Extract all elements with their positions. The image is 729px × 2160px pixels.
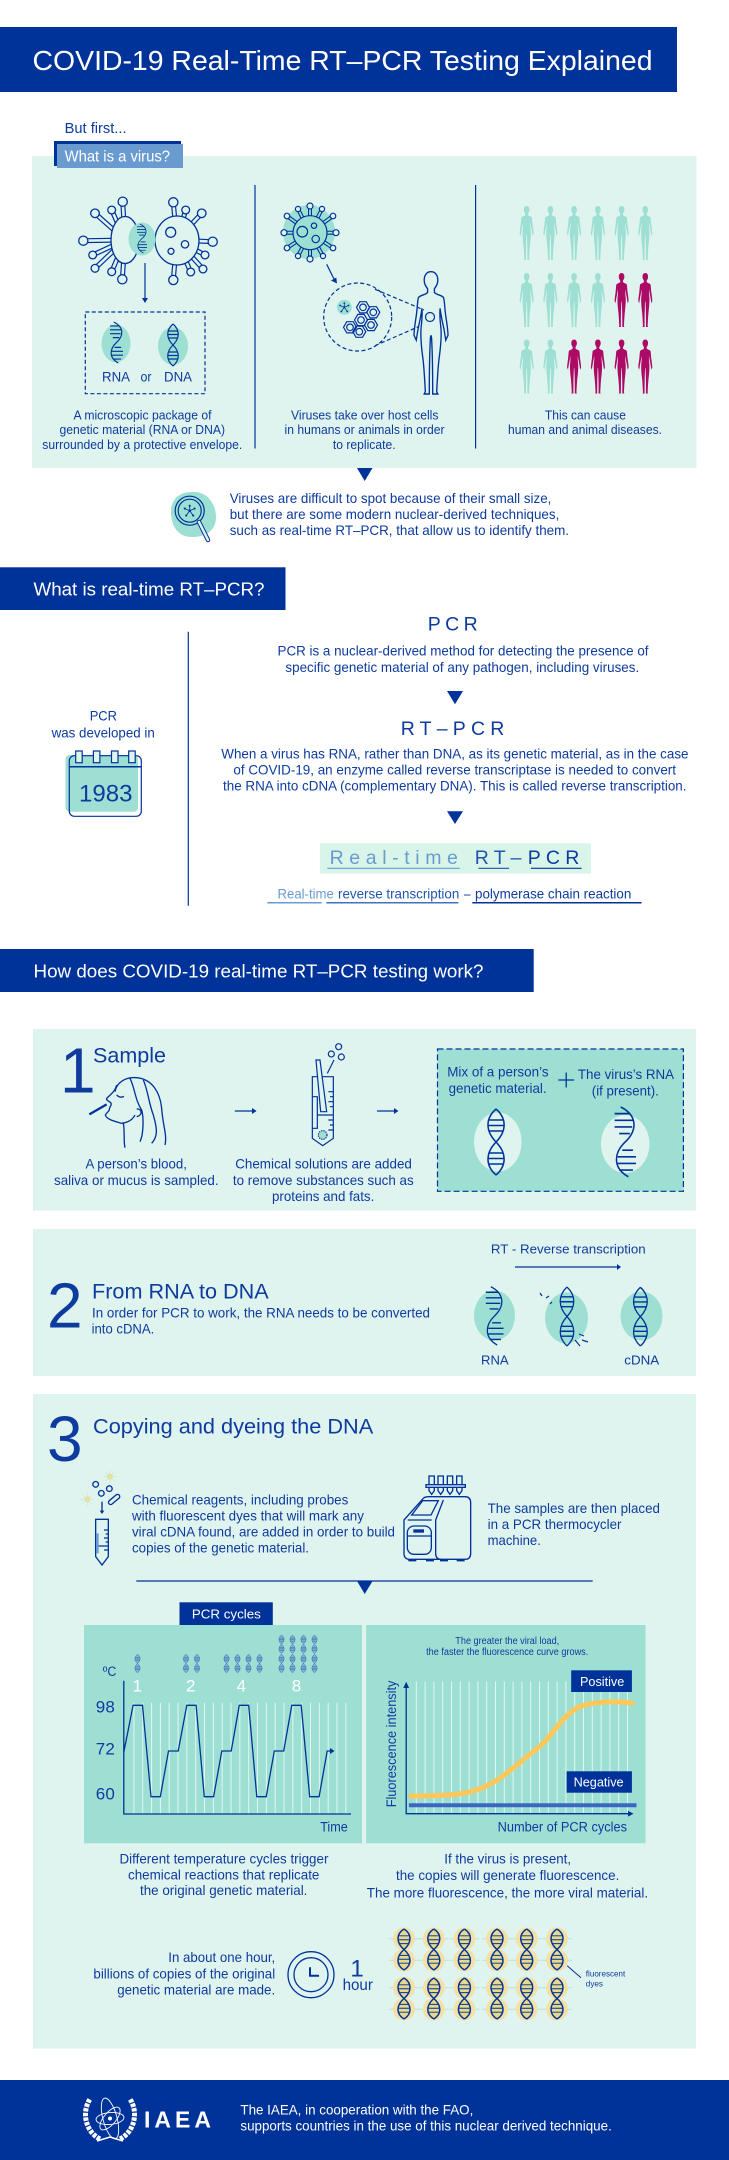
- text: diseases: [508, 408, 662, 437]
- text: viruses are difficult to spot: such as real-time RT–PCR, that allow us to identify them.: [230, 522, 569, 538]
- heading: PCR: PCR: [428, 614, 478, 636]
- text: host cells: in humans or animals in order: [284, 422, 445, 437]
- text: person sampled: A person’s blood,: [86, 1156, 187, 1172]
- footer: [0, 2080, 729, 2160]
- heading: how does testing work: [0, 949, 534, 992]
- callout: fluorescent dyes: dyes: [586, 1979, 603, 1989]
- text: viruses are difficult to spot: but there are some modern nuclear-derived techniques,: [230, 506, 559, 522]
- text: chemical solutions: proteins and fats.: [272, 1188, 374, 1204]
- icon: calendar 1983: 1983: [79, 780, 132, 807]
- text: temperature cycles caption: Different temperature cycles trigger: [120, 1850, 329, 1866]
- logo: IAEA: [85, 2096, 211, 2141]
- text: expanded acronym: Real-time: [278, 885, 334, 901]
- icon: human body outline: [414, 272, 448, 394]
- text: 1 hour: hour: [343, 1977, 374, 1994]
- box: real-time RT-PCR: Real-time: [330, 847, 458, 869]
- box: mix of genetic material: The virus’s RNA: [578, 1066, 675, 1082]
- text: person sampled: [54, 1156, 219, 1188]
- box: RNA or DNA: DNA: [164, 369, 193, 385]
- text: fluorescence caption: the copies will generate fluorescence.: [396, 1867, 619, 1883]
- box: RNA or DNA: RNA: [102, 369, 131, 385]
- text: one hour: billions of copies of the original: [93, 1965, 275, 1981]
- arrow head: [142, 298, 148, 303]
- text: temperature cycles caption: the original genetic material.: [140, 1882, 307, 1898]
- chart: temperature cycles: 98: [96, 1697, 115, 1716]
- chart: temperature cycles: 60: [96, 1784, 115, 1803]
- text: expanded acronym: [267, 885, 642, 903]
- chart: temperature cycles: 1: [133, 1677, 142, 1696]
- text: RT-PCR description: of COVID-19, an enzyme called reverse transcriptase is needed to convert: [233, 761, 676, 777]
- text: PCR description: [278, 643, 649, 675]
- text: thermocycler: machine.: [488, 1532, 541, 1548]
- icon: fluorescent DNA copies: [389, 1928, 572, 2020]
- box: real-time RT-PCR: PCR: [528, 847, 579, 869]
- text: chemical reagents: copies of the genetic material.: [132, 1540, 309, 1556]
- chart: temperature cycles: 4: [237, 1677, 246, 1696]
- chart: fluorescence curve: the faster the fluorescence curve grows.: [426, 1647, 588, 1658]
- chart: fluorescence curve: The greater the viral load,: [455, 1636, 559, 1647]
- text: PCR description: PCR is a nuclear-derived method for detecting the presence of: [278, 643, 649, 659]
- chart: temperature cycles: 72: [96, 1740, 115, 1759]
- heading: copying and dyeing: Copying and dyeing the DNA: [93, 1414, 374, 1438]
- text: chemical reagents: [131, 1492, 395, 1556]
- text: RT-PCR description: When a virus has RNA, rather than DNA, as its genetic material, as in the case: [221, 745, 689, 761]
- text: one hour: In about one hour,: [168, 1949, 275, 1965]
- arrow: RT-PCR to real-time: [447, 811, 463, 824]
- text: host cells: to replicate.: [333, 437, 396, 452]
- heading: from RNA to DNA: From RNA to DNA: [92, 1279, 269, 1303]
- text: PCR developed in: [51, 708, 155, 740]
- icon: virus: [281, 203, 339, 262]
- text: chemical reagents: Chemical reagents, including probes: [132, 1492, 348, 1508]
- divider: [187, 632, 189, 906]
- icon: reagents and tube: [81, 1470, 121, 1565]
- heading: what is real-time RT-PCR: [0, 567, 286, 610]
- text: diseases: human and animal diseases.: [508, 422, 662, 437]
- icon: virus halves with genetic material: [79, 197, 217, 285]
- text: virus definition: genetic material (RNA or DNA): [60, 422, 225, 437]
- chart: temperature cycles: 2: [186, 1677, 195, 1696]
- text: virus definition: surrounded by a protective envelope.: [42, 437, 242, 452]
- chart: fluorescence curve: [366, 1625, 646, 1843]
- icon: calendar 1983: [66, 751, 141, 816]
- icon: thermocycler: [404, 1476, 471, 1560]
- heading: how does testing work: How does COVID-19 real-time RT–PCR testing work?: [34, 962, 484, 982]
- text: IAEA statement: [240, 2101, 612, 2134]
- chart: temperature cycles: ºC: [103, 1664, 117, 1679]
- text: one hour: genetic material are made.: [117, 1981, 275, 1997]
- box: RNA or DNA: [85, 312, 205, 394]
- box: mix of genetic material: [438, 1049, 683, 1191]
- box: real-time RT-PCR: [320, 843, 591, 874]
- panel: what is a virus: [32, 141, 696, 468]
- icon: host cells magnified: [324, 283, 424, 351]
- panel: step 1 sample: [33, 1029, 696, 1211]
- text: IAEA statement: supports countries in the use of this nuclear derived technique.: [240, 2118, 612, 2134]
- title banner: COVID-19 Real-Time RT–PCR Testing Explained: [32, 45, 652, 76]
- chart: temperature cycles: 8: [292, 1677, 301, 1696]
- number 1: 1: [60, 1035, 96, 1107]
- text: fluorescence caption: The more fluorescence, the more viral material.: [367, 1884, 648, 1900]
- chart: fluorescence curve: Fluorescence intensity: [384, 1680, 399, 1807]
- arrow: virus to genetic material: [144, 263, 146, 298]
- callout: fluorescent dyes: [567, 1966, 626, 1989]
- text: expanded acronym: –: [464, 885, 471, 901]
- text: fluorescence caption: [367, 1850, 648, 1900]
- arrow: reverse transcription: [515, 1264, 621, 1270]
- icon: transcribing helix: [540, 1287, 588, 1346]
- chart: fluorescence curve: Negative: [574, 1775, 624, 1790]
- heading: what is real-time RT-PCR: What is real-time RT–PCR?: [34, 580, 264, 600]
- text: expanded acronym: reverse transcription: [338, 885, 459, 901]
- text: viruses are difficult to spot: Viruses are difficult to spot because of their small size,: [230, 490, 551, 506]
- text: temperature cycles caption: [120, 1850, 329, 1898]
- callout: fluorescent dyes: fluorescent: [586, 1969, 626, 1979]
- text: thermocycler: in a PCR thermocycler: [488, 1516, 622, 1532]
- text: 1 hour: [343, 1956, 374, 1994]
- arrow: sample to tube: [235, 1108, 257, 1114]
- icons: multiplying DNA copies: [135, 1635, 317, 1673]
- text: chemical solutions: [233, 1156, 414, 1204]
- text: RT-PCR description: [221, 745, 689, 793]
- panel: what is a virus: What is a virus?: [65, 148, 170, 166]
- text: diseases: This can cause: [545, 408, 626, 423]
- icon: magnifier: [171, 492, 216, 540]
- tab: PCR cycles: [180, 1602, 273, 1625]
- box: mix of genetic material: genetic material.: [449, 1080, 547, 1096]
- arrow: panel down: [357, 468, 372, 481]
- tab: PCR cycles: PCR cycles: [192, 1606, 261, 1621]
- chart: temperature cycles: [84, 1625, 362, 1843]
- text: conversion: [92, 1304, 430, 1336]
- text: viruses are difficult to spot: [230, 490, 569, 538]
- chart: fluorescence curve: Number of PCR cycles: [498, 1820, 627, 1835]
- arrow: tube to mix: [377, 1108, 398, 1114]
- text: fluorescence caption: If the virus is present,: [444, 1850, 571, 1866]
- text: RT-PCR description: the RNA into cDNA (complementary DNA). This is called reverse transcription.: [223, 777, 686, 793]
- text: 1 hour: 1: [350, 1956, 364, 1983]
- arrow: virus into body: [327, 264, 337, 284]
- icon: cDNA helix: cDNA: [624, 1352, 660, 1367]
- divider with arrow: [136, 1581, 593, 1594]
- icon: test tube with swab: [312, 1044, 344, 1146]
- box: real-time RT-PCR: RT: [475, 847, 506, 869]
- text: conversion: into cDNA.: [92, 1320, 154, 1336]
- text: chemical reagents: with fluorescent dyes that will mark any: [131, 1508, 364, 1524]
- text: PCR developed in: PCR: [90, 708, 117, 724]
- logo: IAEA: IAEA: [144, 2106, 211, 2132]
- text: virus definition: [42, 408, 242, 452]
- heading: RT-PCR: RT–PCR: [401, 718, 504, 740]
- text: thermocycler: The samples are then placed: [488, 1500, 660, 1516]
- text: virus definition: A microscopic package of: [74, 408, 212, 423]
- text: IAEA statement: The IAEA, in cooperation with the FAO,: [240, 2101, 473, 2117]
- chart: temperature cycles: Time: [320, 1820, 348, 1835]
- box: mix of genetic material: (if present).: [592, 1082, 659, 1098]
- heading: sample: Sample: [93, 1044, 166, 1068]
- text: host cells: Viruses take over host cells: [291, 408, 439, 423]
- text: but first: But first...: [65, 121, 127, 137]
- panel: step 2 RNA to DNA: [33, 1229, 696, 1376]
- icon: RNA helix: [474, 1287, 515, 1367]
- text: chemical solutions: to remove substances such as: [233, 1172, 414, 1188]
- text: chemical reagents: viral cDNA found, are added in order to build: [132, 1524, 395, 1540]
- panel: step 3 copying and dyeing: [33, 1394, 696, 2049]
- chart: fluorescence curve: Positive: [580, 1674, 624, 1689]
- text: reverse transcription: RT - Reverse transcription: [491, 1241, 646, 1256]
- text: temperature cycles caption: chemical reactions that replicate: [128, 1866, 320, 1882]
- text: chemical solutions: Chemical solutions are added: [235, 1156, 412, 1172]
- text: conversion: In order for PCR to work, the RNA needs to be converted: [92, 1304, 430, 1320]
- text: one hour: [93, 1949, 275, 1997]
- box: mix of genetic material: Mix of a person’s: [447, 1064, 549, 1080]
- icon: RNA helix: RNA: [481, 1352, 509, 1367]
- title banner: [0, 27, 677, 92]
- text: thermocycler: [488, 1500, 660, 1548]
- text: expanded acronym: polymerase chain reaction: [475, 885, 631, 901]
- icon: person being swabbed: [89, 1078, 166, 1148]
- text: PCR description: specific genetic material of any pathogen, including viruses.: [285, 659, 639, 675]
- number 3: 3: [47, 1403, 83, 1475]
- icon: clock: [288, 1952, 334, 1998]
- text: person sampled: saliva or mucus is sampled.: [54, 1172, 219, 1188]
- box: real-time RT-PCR: –: [510, 847, 522, 869]
- box: RNA or DNA: or: [140, 369, 152, 385]
- text: host cells: [284, 408, 445, 452]
- text: PCR developed in: was developed in: [51, 724, 155, 740]
- icon: cDNA helix: [620, 1287, 662, 1367]
- icon: people grid, healthy and ill: [520, 206, 652, 394]
- arrow: PCR to RT-PCR: [447, 691, 463, 704]
- number 2: 2: [47, 1269, 83, 1341]
